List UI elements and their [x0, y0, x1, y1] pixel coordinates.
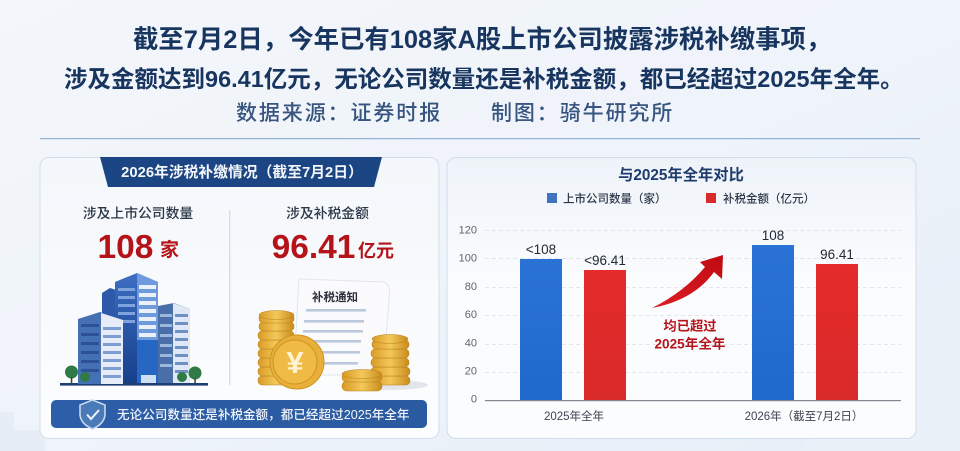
y axis labels: 80: [465, 281, 477, 293]
legend: 补税金额（亿元）: [723, 192, 815, 206]
stat: tax amount: 涉及补税金额: [286, 205, 369, 221]
callout: exceeded 2025: [654, 318, 726, 352]
callout bar: 无论公司数量还是补税金额，都已经超过2025年全年: [117, 407, 410, 422]
callout: exceeded 2025: 2025年全年: [654, 336, 726, 352]
source line: 制图：骑牛研究所: [491, 102, 674, 125]
bar chart: 2026年（截至7月2日）: [745, 409, 863, 423]
bar chart: [485, 228, 901, 423]
stat: tax amount: [272, 205, 394, 266]
title: 截至7月2日，今年已有108家A股上市公司披露涉税补缴事项，: [133, 26, 831, 54]
icon: tax notice document: [295, 279, 389, 375]
stat: company count: 涉及上市公司数量: [83, 205, 193, 221]
y axis labels: 0: [471, 394, 477, 406]
y axis labels: 120: [459, 224, 477, 236]
document heading: 补税通知: [312, 290, 358, 304]
icon: shield check: [80, 400, 105, 429]
legend: 上市公司数量（家）: [563, 192, 666, 206]
bar chart: <108: [526, 242, 556, 257]
icon: office buildings: [60, 273, 208, 386]
stat: company count: 家: [160, 238, 179, 261]
y axis labels: 60: [465, 309, 477, 321]
callout bar: [51, 400, 427, 429]
icon: gold coins: [258, 310, 428, 391]
panel banner: 2026年涉税补缴情况（截至7月2日）: [121, 163, 363, 181]
bar chart: 96.41: [820, 247, 854, 262]
source line: 数据来源：证券时报: [236, 102, 442, 125]
title: [64, 26, 904, 92]
stat: company count: [83, 205, 193, 266]
chart heading: 与2025年全年对比: [618, 166, 744, 184]
y axis labels: 40: [465, 338, 477, 350]
panel: comparison with 2025: [447, 158, 916, 438]
panel: 2026 tax payments: [40, 157, 439, 438]
bar chart: <96.41: [584, 253, 626, 268]
icon: gold coins: ¥: [286, 345, 304, 380]
arrow: upward trend: [652, 255, 723, 308]
y axis labels: [459, 224, 477, 406]
legend: [547, 192, 815, 206]
source line: [236, 102, 674, 125]
panel banner: [100, 157, 382, 187]
title: 涉及金额达到96.41亿元，无论公司数量还是补税金额，都已经超过2025年全年。: [64, 65, 904, 92]
stat: company count: 108: [98, 229, 153, 266]
bar chart: 108: [762, 228, 784, 243]
stat: tax amount: 96.41: [272, 229, 355, 266]
y axis labels: 100: [459, 252, 477, 264]
stat: tax amount: 亿元: [358, 241, 394, 261]
callout: exceeded 2025: 均已超过: [663, 318, 717, 334]
bar chart: 2025年全年: [544, 409, 604, 423]
y axis labels: 20: [465, 366, 477, 378]
